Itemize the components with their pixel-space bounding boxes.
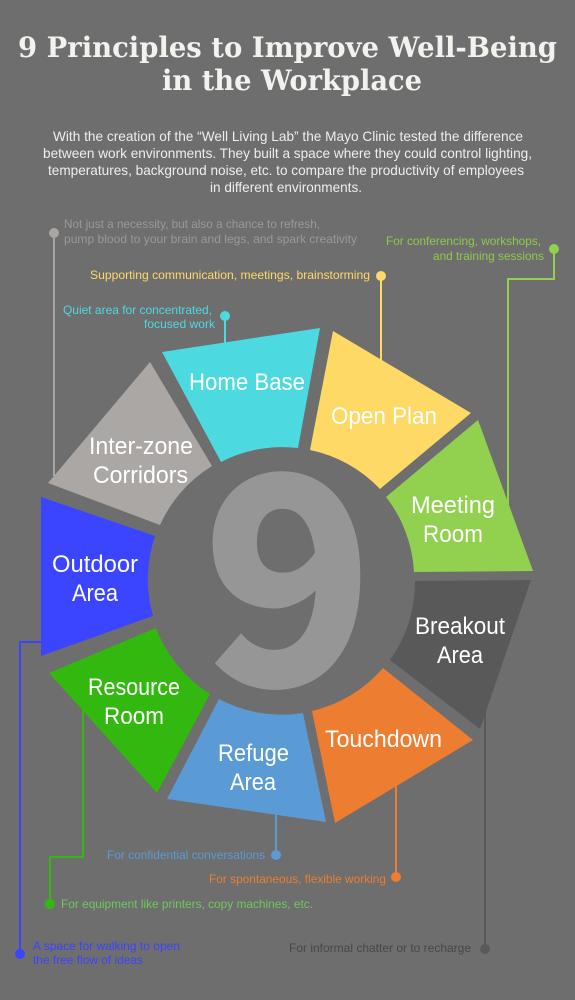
panel: resource room: Room bbox=[104, 703, 164, 730]
callout: inter-zone corridors: Not just a necessity, but also a chance to refresh, bbox=[64, 217, 320, 231]
panel: breakout area bbox=[390, 580, 531, 729]
panel: meeting room: Room bbox=[423, 521, 483, 548]
callout: breakout area: For informal chatter or to recharge bbox=[289, 941, 471, 955]
callout: touchdown bbox=[209, 782, 401, 886]
panel: breakout area: Breakout bbox=[415, 613, 505, 640]
callout: open plan: Supporting communication, meetings, brainstorming bbox=[90, 268, 370, 282]
panel: outdoor area: Outdoor bbox=[52, 551, 138, 578]
callout: outdoor area bbox=[15, 642, 180, 967]
callout: refuge area bbox=[107, 812, 281, 862]
title bbox=[18, 31, 557, 97]
panel: inter-zone corridors: Inter-zone bbox=[89, 433, 193, 460]
callout: meeting room: For conferencing, workshops, bbox=[386, 234, 541, 248]
panel: home base bbox=[162, 328, 320, 462]
panel: refuge area: Area bbox=[230, 769, 277, 796]
panel: inter-zone corridors bbox=[48, 362, 212, 525]
callout: home base: focused work bbox=[144, 317, 216, 331]
intro text block bbox=[43, 128, 532, 195]
callout: outdoor area: A space for walking to open bbox=[33, 939, 180, 953]
panel: outdoor area: Area bbox=[72, 580, 119, 607]
panel: open plan: Open Plan bbox=[331, 403, 437, 430]
intro text block: With the creation of the “Well Living Lab” the Mayo Clinic tested the difference bbox=[53, 128, 523, 144]
callout: resource room bbox=[45, 705, 313, 911]
callout: resource room: For equipment like printers, copy machines, etc. bbox=[61, 897, 313, 911]
panel: inter-zone corridors: Corridors bbox=[93, 462, 188, 489]
callout: breakout area bbox=[289, 710, 490, 955]
callout: inter-zone corridors bbox=[49, 217, 357, 476]
callout: outdoor area: the free flow of ideas bbox=[33, 953, 143, 967]
panel: meeting room bbox=[386, 420, 533, 572]
callout: refuge area: For confidential conversations bbox=[107, 848, 265, 862]
callout: home base bbox=[63, 303, 230, 345]
callout: open plan bbox=[90, 268, 386, 360]
panel: resource room bbox=[49, 628, 210, 793]
intro text block: between work environments. They built a space where they could control lighting, bbox=[43, 145, 532, 161]
intro text block: temperatures, background noise, etc. to compare the productivity of employees bbox=[48, 162, 524, 178]
callout: meeting room: and training sessions bbox=[433, 249, 544, 263]
callout: home base: Quiet area for concentrated, bbox=[63, 303, 212, 317]
panel: home base: Home Base bbox=[189, 369, 305, 396]
big number 9: 9 bbox=[204, 354, 372, 765]
panel: touchdown: Touchdown bbox=[325, 726, 442, 753]
callout: meeting room bbox=[386, 234, 559, 505]
panel: outdoor area bbox=[41, 497, 155, 656]
panel: resource room: Resource bbox=[88, 674, 180, 701]
callout: inter-zone corridors: pump blood to your brain and legs, and spark creativity bbox=[64, 232, 357, 246]
panel: breakout area: Area bbox=[437, 642, 484, 669]
panel: refuge area bbox=[167, 699, 326, 822]
title: 9 Principles to Improve Well-Being bbox=[18, 31, 557, 64]
panel: open plan bbox=[310, 331, 471, 489]
title: in the Workplace bbox=[162, 64, 422, 97]
panel: meeting room: Meeting bbox=[411, 492, 495, 519]
intro text block: in different environments. bbox=[210, 179, 362, 195]
panel: touchdown bbox=[312, 668, 473, 823]
callout: touchdown: For spontaneous, flexible working bbox=[209, 872, 386, 886]
panel: refuge area: Refuge bbox=[218, 740, 289, 767]
